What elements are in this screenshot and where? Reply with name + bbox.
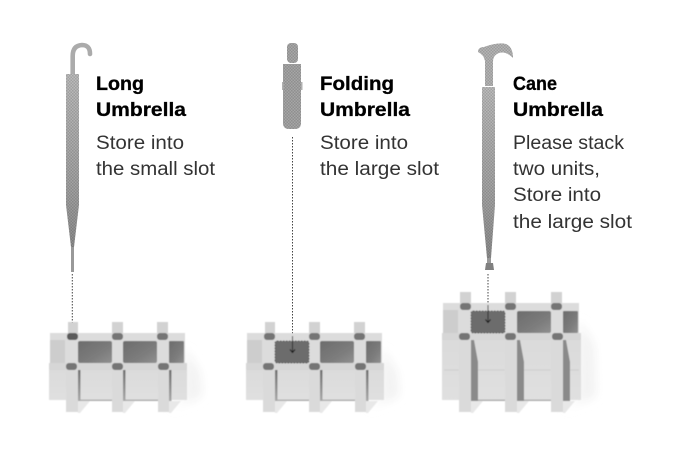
- rack: single unit under folding umbrella: [246, 322, 399, 413]
- text: folding umbrella instruction: the large slot: [320, 159, 440, 180]
- long umbrella group: [66, 45, 216, 336]
- heading: long umbrella: Umbrella: [96, 99, 186, 121]
- heading: long umbrella: Long: [96, 73, 144, 95]
- dotted arrow: cane umbrella into large slot: [487, 274, 489, 305]
- text: long umbrella instruction: Store into: [96, 133, 184, 154]
- text: cane umbrella instruction: the large slot: [513, 212, 633, 233]
- text: cane umbrella instruction: two units,: [513, 159, 600, 180]
- heading: cane umbrella: Umbrella: [513, 99, 603, 121]
- dotted arrow: folding umbrella into large slot: [292, 137, 294, 338]
- text: long umbrella instruction: the small slot: [96, 159, 216, 180]
- icon: long umbrella: [66, 45, 90, 272]
- cane umbrella group: [478, 43, 633, 305]
- folding umbrella group: [282, 43, 440, 338]
- text: cane umbrella instruction: Please stack: [513, 133, 624, 154]
- dotted arrow: long umbrella into small slot: [71, 274, 73, 336]
- heading: folding umbrella: Folding: [320, 73, 394, 95]
- heading: folding umbrella: Umbrella: [320, 99, 410, 121]
- text: cane umbrella instruction: Store into: [513, 185, 601, 206]
- icon: cane umbrella: [478, 43, 513, 270]
- heading: cane umbrella: Cane: [513, 73, 557, 95]
- icon: folding umbrella: [282, 43, 302, 129]
- text: folding umbrella instruction: Store into: [320, 133, 408, 154]
- rack: single unit under long umbrella: [49, 322, 202, 413]
- rack: stacked double unit under cane umbrella: [442, 292, 596, 413]
